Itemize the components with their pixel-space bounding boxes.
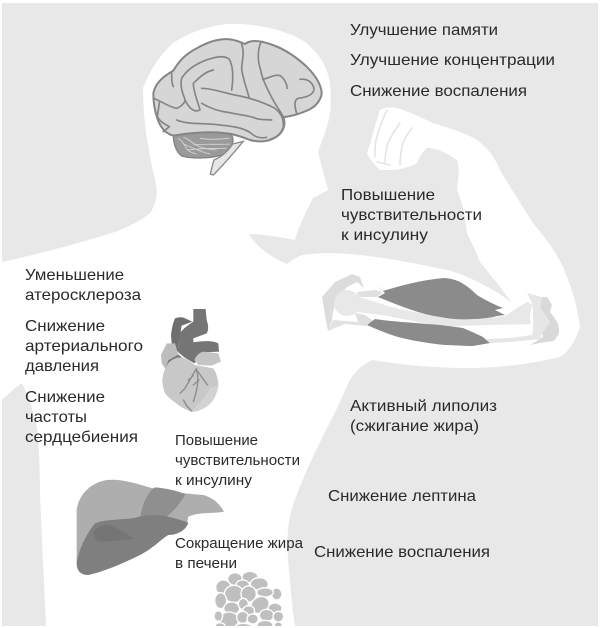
text: liver benefits: чувствительности [175,452,300,469]
icon: liver [77,480,224,575]
text: liver benefits: Сокращение жира [175,535,304,552]
text: liver benefits: Повышение [175,432,258,449]
cerebellum [173,132,233,158]
aorta and pulmonary trunk [178,309,219,363]
ventricles [162,358,218,412]
text: muscle benefit [341,187,482,244]
elbow joint [530,297,559,345]
cerebrum [153,39,322,141]
left atrium [161,343,178,368]
ventricle highlight [192,385,218,412]
lower bone strip [328,320,365,331]
upper muscle [376,278,505,319]
text: fat tissue benefits: Активный липолиз [350,398,497,415]
text: liver benefits: к инсулину [175,472,253,489]
text: heart benefits: Снижение [25,389,105,406]
lower lobe [77,515,188,575]
humerus head [334,290,360,316]
right lobe [77,480,224,563]
right atrium [194,352,221,366]
text: fat tissue benefits: (сжигание жира) [350,418,479,435]
text: fat tissue benefits: Снижение лептина [328,488,476,505]
text: heart benefits [25,267,143,446]
text: brain benefits [350,22,555,100]
text: brain benefits: Снижение воспаления [350,83,527,100]
icon: fat cells [214,571,284,628]
coronary vessels [180,368,208,411]
text: heart benefits: сердцебиения [25,429,138,446]
text: liver benefits: в печени [175,555,237,572]
radius tip [355,313,375,326]
text: muscle benefit: к инсулину [341,227,428,244]
left vessel [171,317,192,352]
tendon [357,290,383,297]
text: heart benefits: Снижение [25,318,105,335]
text: heart benefits: давления [25,358,99,375]
text: fat tissue benefits [314,398,497,561]
text: heart benefits: Уменьшение [25,267,124,284]
lower muscle [367,319,490,346]
text: brain benefits: Улучшение памяти [350,22,498,39]
text: muscle benefit: чувствительности [341,207,482,224]
icon: heart [161,309,221,412]
text: heart benefits: артериального [25,338,143,355]
humerus shaft [356,296,533,327]
icon: arm muscles and bones [322,274,559,346]
text: heart benefits: атеросклероза [25,287,141,304]
brainstem [210,141,243,175]
icon: brain [153,39,322,175]
text: muscle benefit: Повышение [341,187,435,204]
fist finger lines [375,110,412,165]
text: fat tissue benefits: Снижение воспаления [314,544,490,561]
text: liver benefits [175,432,304,572]
text: brain benefits: Улучшение концентрации [350,52,555,69]
text: heart benefits: частоты [25,409,87,426]
middle lobe [140,487,185,517]
dark strip [165,354,182,370]
bone cap [322,274,364,331]
dark patch [93,525,134,542]
elbow light band [485,293,550,343]
